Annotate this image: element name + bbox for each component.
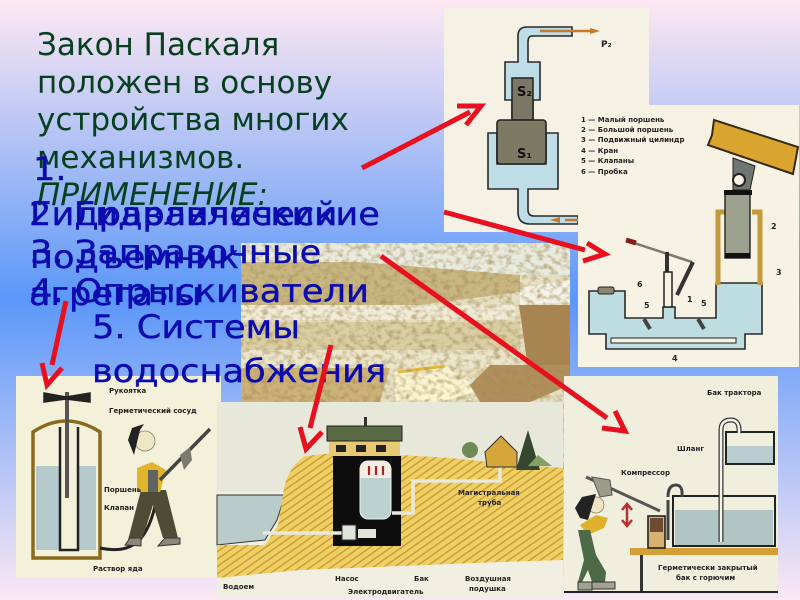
- moving cylinder: [718, 212, 760, 285]
- hose: [100, 490, 158, 550]
- small piston S2: S₂: [517, 85, 532, 100]
- large piston: [724, 190, 752, 258]
- sprayer piston cylinder: [60, 427, 78, 550]
- sprayer labels: Поршень: [104, 486, 142, 494]
- water supply labels: Бак: [414, 575, 429, 583]
- table: [564, 548, 778, 593]
- jack numbers: 1: [687, 295, 693, 304]
- water supply labels: подушка: [469, 585, 506, 593]
- sprayer labels: Рукоятка: [109, 387, 147, 395]
- list item 5: водоснабжения: [92, 353, 386, 390]
- refuelling labels: Шланг: [677, 445, 704, 453]
- jack legend: [581, 116, 684, 176]
- fuel hose: [721, 420, 739, 542]
- list item 3: 3. Заправочные: [30, 234, 321, 271]
- large piston S1: [497, 120, 546, 164]
- sprayer labels: Герметический сосуд: [109, 407, 197, 415]
- person with pump handle: [575, 477, 660, 590]
- panel: sprayer diagram: [16, 376, 221, 578]
- arrow: to hydraulic press: [362, 106, 481, 168]
- jack legend: 5 — Клапаны: [581, 157, 634, 165]
- pump chamber: [333, 456, 401, 546]
- jack legend: 2 — Большой поршень: [581, 126, 674, 134]
- intro text: механизмов.: [37, 140, 244, 176]
- jack legend: 3 — Подвижный цилиндр: [581, 136, 684, 144]
- valves: [644, 319, 704, 329]
- sprayer labels: [93, 387, 197, 573]
- water supply labels: Насос: [335, 575, 359, 583]
- jack numbers: [637, 222, 782, 363]
- arrow: to water supply: [300, 345, 331, 449]
- water supply labels: Магистральная: [458, 489, 520, 497]
- compressor: [648, 485, 682, 548]
- list item 5: [92, 309, 386, 390]
- water supply labels: Водоем: [223, 583, 254, 591]
- wood beam: [708, 120, 798, 174]
- pressure arrows: [540, 28, 600, 223]
- water tank: [360, 461, 391, 519]
- up-down arrow: [622, 504, 632, 526]
- jack legend: 4 — Кран: [581, 147, 618, 155]
- panel: water supply diagram: [217, 402, 563, 598]
- sprayer rod and handle: [44, 392, 90, 498]
- water supply labels: Электродвигатель: [348, 588, 424, 596]
- refuelling labels: Бак трактора: [707, 389, 762, 397]
- piston fork: [733, 158, 755, 190]
- large piston S1: S₁: [517, 147, 532, 162]
- tractor tank: [726, 432, 774, 464]
- jack numbers: 5: [701, 299, 707, 308]
- sprayer labels: Клапан: [104, 504, 134, 512]
- jack numbers: 6: [637, 280, 643, 289]
- jack numbers: 4: [672, 354, 678, 363]
- water supply labels: Воздушная: [465, 575, 511, 583]
- list item 1: Гидравлический: [30, 196, 337, 233]
- village house and trees: [462, 430, 552, 470]
- air arrows in tank: [369, 466, 383, 475]
- sprayer labels: Раствор яда: [93, 565, 143, 573]
- panel: hydraulic jack diagram: [578, 105, 799, 367]
- pump: [342, 525, 376, 540]
- main pipe: [263, 465, 500, 533]
- list item 1: подъемник: [30, 239, 239, 276]
- fluid path of press: [488, 27, 578, 224]
- photo: hydraulic engineering landscape: [241, 243, 570, 503]
- refuelling labels: [621, 389, 762, 582]
- intro text: положен в основу: [37, 65, 332, 101]
- heading: application: ПРИМЕНЕНИЕ:: [37, 177, 268, 213]
- jack legend: 1 — Малый поршень: [581, 116, 665, 124]
- pump lever: [626, 240, 693, 307]
- connecting pipe and valve: [611, 338, 736, 343]
- list item 4: 4. Опрыскиватели: [30, 273, 369, 310]
- water supply labels: труба: [478, 499, 502, 507]
- arrow: to hydraulic jack: [444, 212, 605, 261]
- pump house: [327, 417, 402, 456]
- jack numbers: 3: [776, 268, 782, 277]
- intro text: Закон Паскаля: [37, 27, 279, 63]
- sprayer liquid: [36, 466, 96, 550]
- list item 2: 2. Гидравлические: [29, 196, 380, 233]
- water supply labels: [223, 489, 520, 596]
- small piston S2: [512, 78, 533, 120]
- jack numbers: 2: [771, 222, 777, 231]
- panel: hydraulic press diagram: [444, 8, 649, 232]
- jack numbers: 5: [644, 301, 650, 310]
- person with spray gun: [125, 424, 210, 546]
- jack legend: 6 — Пробка: [581, 168, 628, 176]
- arrow: to refuelling diagram: [381, 256, 625, 431]
- list item 2: [29, 196, 380, 313]
- hill ground: [217, 453, 563, 578]
- refuelling labels: Компрессор: [621, 469, 670, 477]
- plug: [598, 287, 614, 294]
- reservoir water: [217, 495, 285, 545]
- list item 1: 1.: [33, 151, 67, 188]
- jack fluid: [589, 283, 762, 349]
- arrow: to sprayer: [42, 301, 66, 385]
- sprayer vessel: [33, 421, 100, 558]
- refuelling labels: Герметически закрытый: [658, 564, 758, 572]
- refuelling labels: бак с горючим: [676, 574, 735, 582]
- label p2: P₂: [601, 40, 612, 50]
- list item 2: агрегаты: [29, 276, 201, 313]
- fuel tank: [673, 496, 775, 546]
- intro text: устройства многих: [37, 102, 349, 138]
- list item 5: 5. Системы: [92, 309, 300, 346]
- list item 1: [30, 151, 337, 276]
- panel: tractor refuelling diagram: [564, 376, 778, 594]
